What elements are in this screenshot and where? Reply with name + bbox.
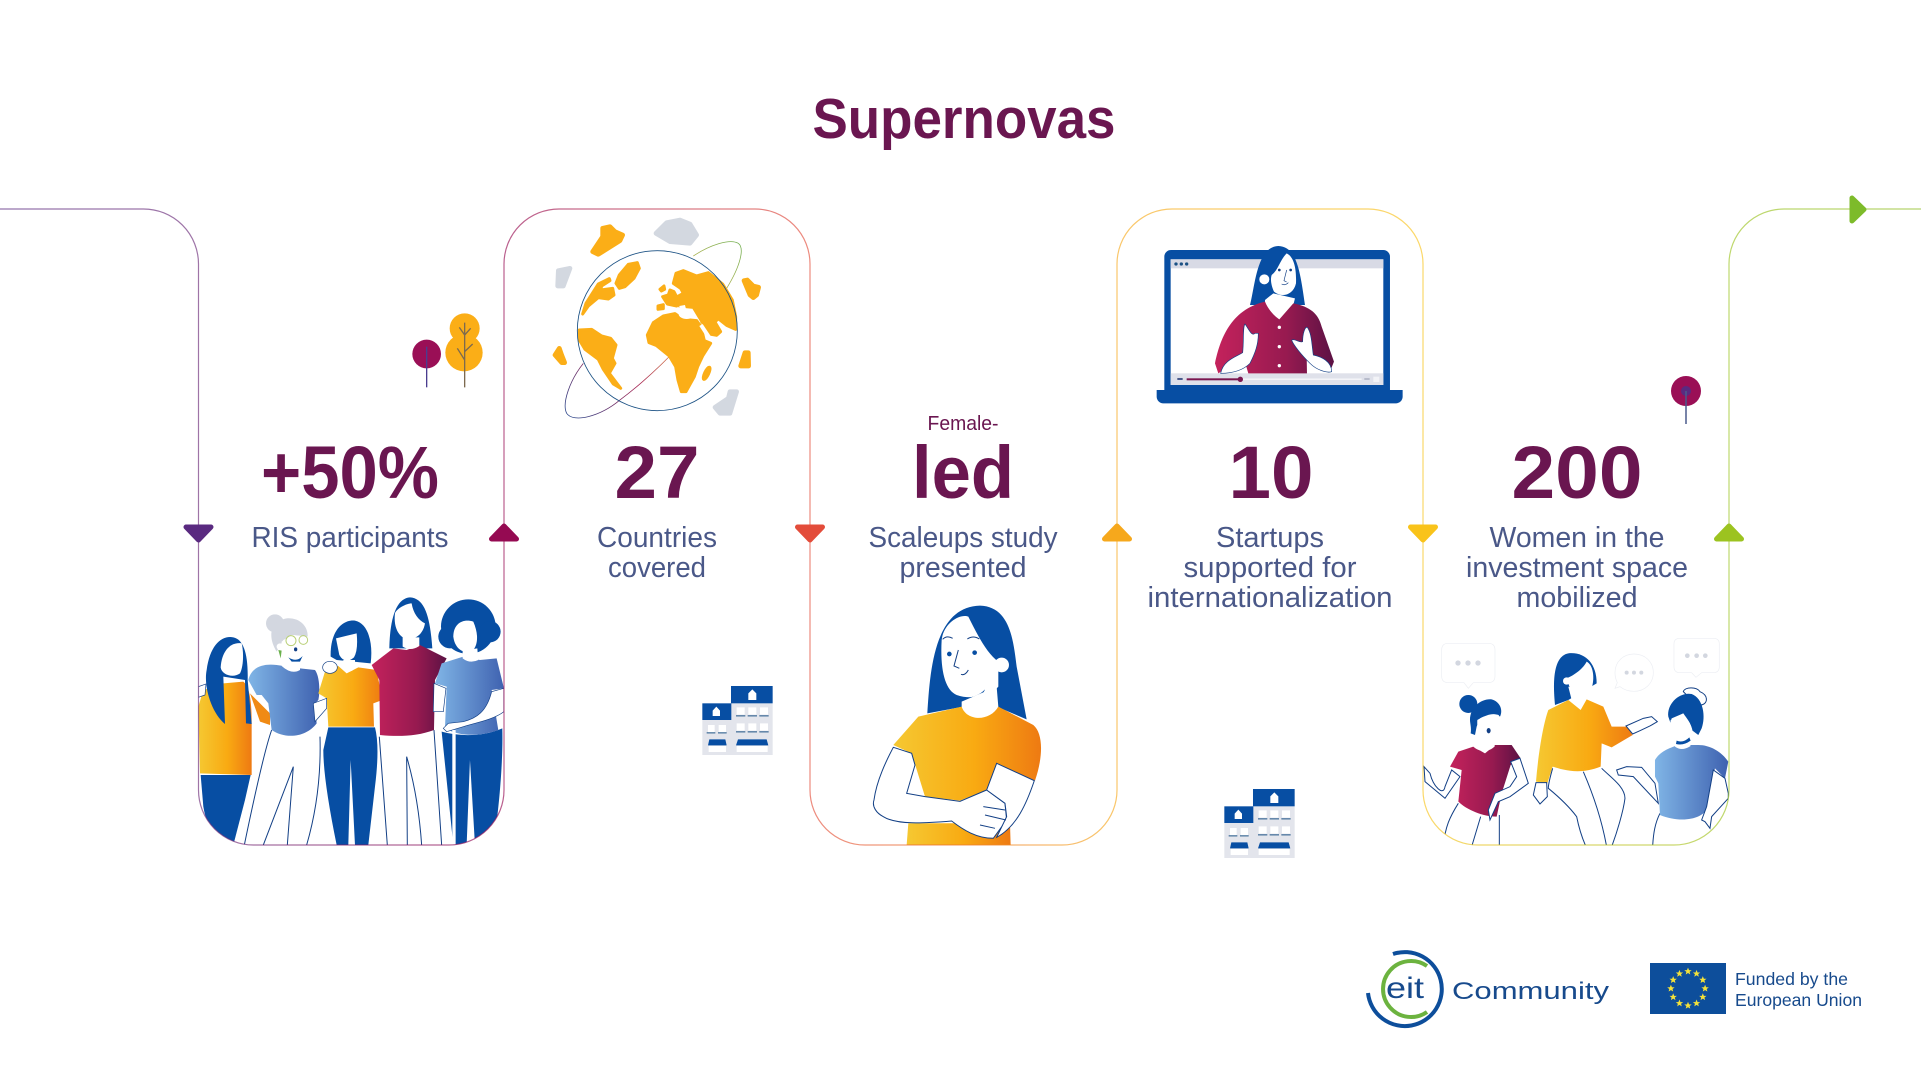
stat: female-led scaleups study: Scaleups study [868, 522, 1058, 554]
illustration: woman with crossed arms [873, 606, 1041, 845]
stat: female-led scaleups study [868, 413, 1058, 584]
logo: EIT Community [1368, 952, 1609, 1026]
woman in yellow shirt [313, 621, 382, 845]
stat: 200 women: investment space [1466, 552, 1688, 584]
stat: +50% RIS participants [252, 431, 448, 554]
woman right [1617, 688, 1728, 847]
stat: 200 women [1466, 431, 1688, 614]
illustration: group of five women [198, 597, 504, 845]
stat: 200 women: 200 [1512, 431, 1642, 514]
globe outline [577, 251, 737, 411]
woman with curly hair and cane [433, 599, 504, 845]
stat: 200 women: mobilized [1516, 582, 1638, 614]
sea cut-outs [679, 305, 711, 337]
stat: 10 startups: 10 [1228, 431, 1314, 514]
connecting line [0, 209, 1921, 845]
stat: 10 startups: supported for [1184, 552, 1357, 584]
woman with grey hair [244, 614, 322, 845]
illustration: globe [555, 220, 759, 418]
logo: EU flag and funding text: European Union [1735, 990, 1862, 1010]
stat: 10 startups: internationalization [1148, 582, 1392, 614]
stat: +50% RIS participants: +50% [261, 431, 439, 514]
stat: 10 startups [1148, 431, 1392, 614]
icon: trees left [412, 313, 483, 387]
illustration: woman in laptop [1157, 246, 1403, 403]
logo: EU flag and funding text: Funded by the [1735, 969, 1848, 989]
continents [579, 263, 736, 392]
stat: 200 women: Women in the [1490, 522, 1664, 554]
arrow markers [186, 198, 1864, 540]
woman in maroon shirt [372, 597, 450, 845]
stat: 27 countries covered: 27 [614, 431, 700, 514]
stat: 27 countries covered: Countries [597, 522, 717, 554]
woman left [1424, 695, 1528, 847]
logo: EIT Community: Community [1452, 978, 1609, 1005]
left woman [198, 637, 270, 845]
icon: buildings 2 [1224, 789, 1295, 858]
illustration: women talking [1424, 638, 1728, 847]
stat: female-led scaleups study: led [912, 431, 1014, 514]
woman middle [1533, 653, 1657, 847]
icon: buildings 1 [702, 686, 773, 755]
clouds [555, 220, 759, 413]
icon: tree right [1671, 376, 1701, 424]
stat: female-led scaleups study: Female- [928, 413, 998, 435]
stat: +50% RIS participants: RIS participants [252, 522, 448, 554]
speech bubbles [1442, 638, 1719, 691]
title: Supernovas [812, 87, 1116, 151]
logo: EU flag and funding text [1650, 963, 1862, 1014]
stat: 27 countries covered [597, 431, 717, 584]
stat: female-led scaleups study: presented [900, 552, 1026, 584]
logo: EIT Community: eit [1386, 972, 1425, 1005]
stat: 10 startups: Startups [1216, 522, 1324, 554]
stat: 27 countries covered: covered [608, 552, 706, 584]
orbit [565, 242, 741, 418]
